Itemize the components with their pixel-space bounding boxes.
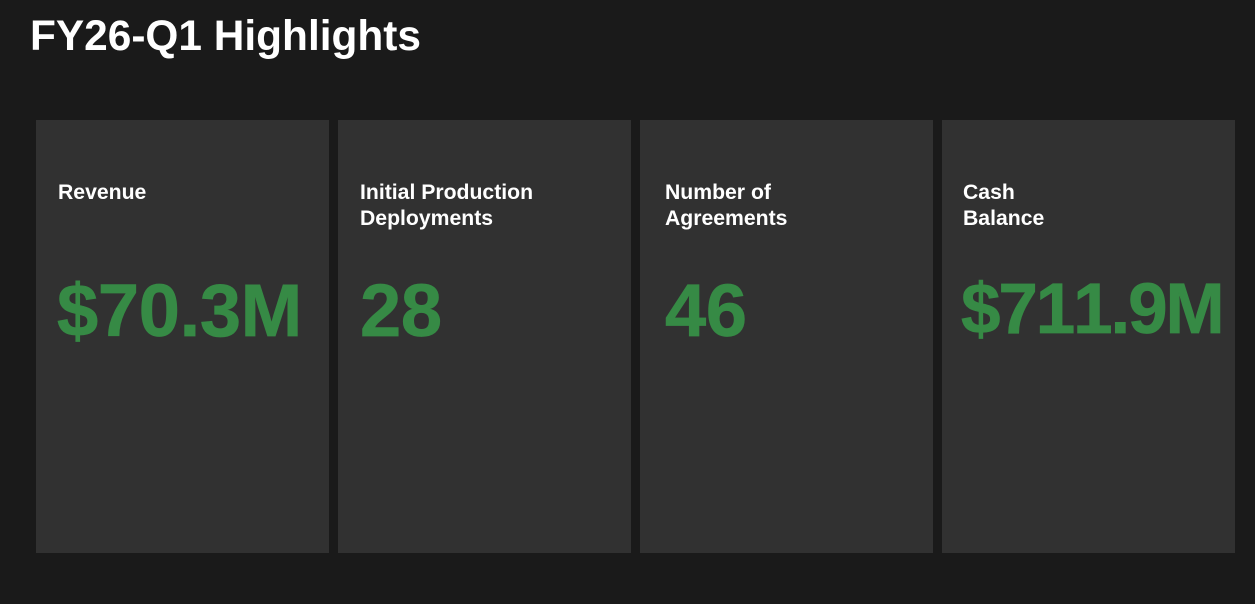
cash balance value: $711.9M [961,270,1223,349]
agreements label [665,181,787,230]
agreements label: Agreements [665,207,787,230]
cash balance label [963,181,1044,230]
deployments label: Initial Production [360,181,533,204]
title: FY26-Q1 Highlights [30,12,421,59]
agreements label: Number of [665,181,771,204]
deployments label [360,181,533,230]
deployments value: 28 [360,269,442,352]
revenue value: $70.3M [57,269,302,352]
panel: deployments [338,120,631,553]
cash balance label: Cash [963,181,1015,204]
revenue label: Revenue [58,181,146,204]
deployments label: Deployments [360,207,493,230]
panel: revenue [36,120,329,553]
agreements value: 46 [665,269,747,352]
cash balance label: Balance [963,207,1044,230]
panel: agreements [640,120,933,553]
panel: cash balance [942,120,1235,553]
